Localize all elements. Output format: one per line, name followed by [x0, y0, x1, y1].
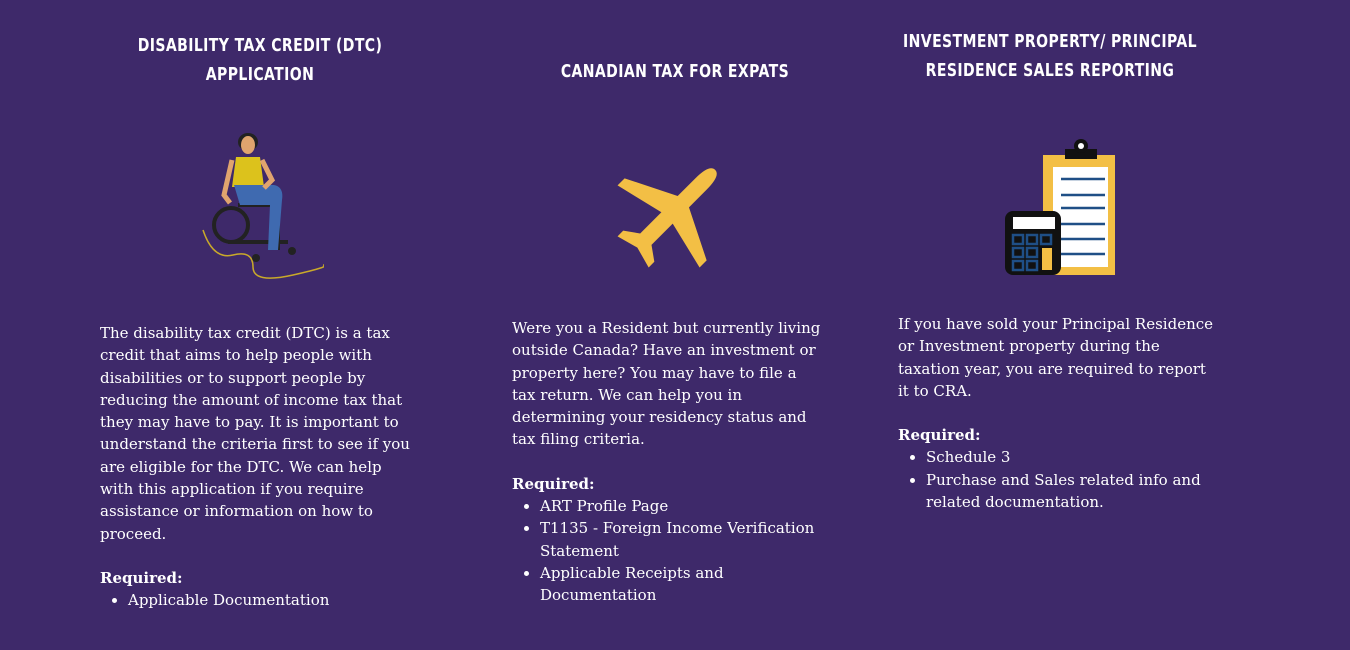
text: expats: Applicable Receipts and Documentation	[540, 564, 724, 604]
text: DTC: Applicable Documentation	[128, 591, 329, 609]
text: expats: Required:	[512, 475, 595, 493]
icon: clipboard and calculator	[1005, 139, 1115, 275]
text: property: Schedule 3	[926, 448, 1010, 466]
text: property: Purchase and Sales related info and related documentation.	[926, 471, 1201, 511]
text: DTC: Required:	[100, 569, 183, 587]
icon: wheelchair woman	[202, 133, 324, 279]
title: property	[903, 31, 1197, 81]
text: expats: property here? You may have to file a	[512, 364, 797, 382]
text: expats: tax filing criteria.	[512, 430, 645, 448]
text: property: Required:	[898, 426, 981, 444]
title: DTC: APPLICATION	[206, 64, 314, 85]
title: property: RESIDENCE SALES REPORTING	[926, 60, 1174, 81]
text: expats: Were you a Resident but currently living	[512, 319, 820, 337]
title: DTC	[138, 35, 382, 85]
text: property: If you have sold your Principal Residence or Investment property during the taxation year, you are required to report it to CRA.	[898, 315, 1213, 400]
text: expats: T1135 - Foreign Income Verification Statement	[540, 519, 814, 560]
text: expats: tax return. We can help you in	[512, 386, 742, 404]
text: DTC: The disability tax credit (DTC) is a tax credit that aims to help people with disabilities or to support people by reducing the amount of income tax that they may have to pay. It is important to understand the criteria first to see if you are eligible for the DTC. We can help with this application if you require assistance or information on how to proceed.	[100, 324, 410, 543]
text: expats	[512, 319, 820, 604]
title: property: INVESTMENT PROPERTY/ PRINCIPAL	[903, 31, 1197, 52]
icon: airplane	[618, 168, 717, 268]
text: expats: determining your residency status and	[512, 408, 807, 426]
title: expats: CANADIAN TAX FOR EXPATS	[561, 61, 789, 82]
text: expats: ART Profile Page	[540, 497, 668, 515]
text: property	[898, 315, 1213, 511]
text: expats: outside Canada? Have an investment or	[512, 341, 816, 359]
title: DTC: DISABILITY TAX CREDIT (DTC)	[138, 35, 382, 56]
